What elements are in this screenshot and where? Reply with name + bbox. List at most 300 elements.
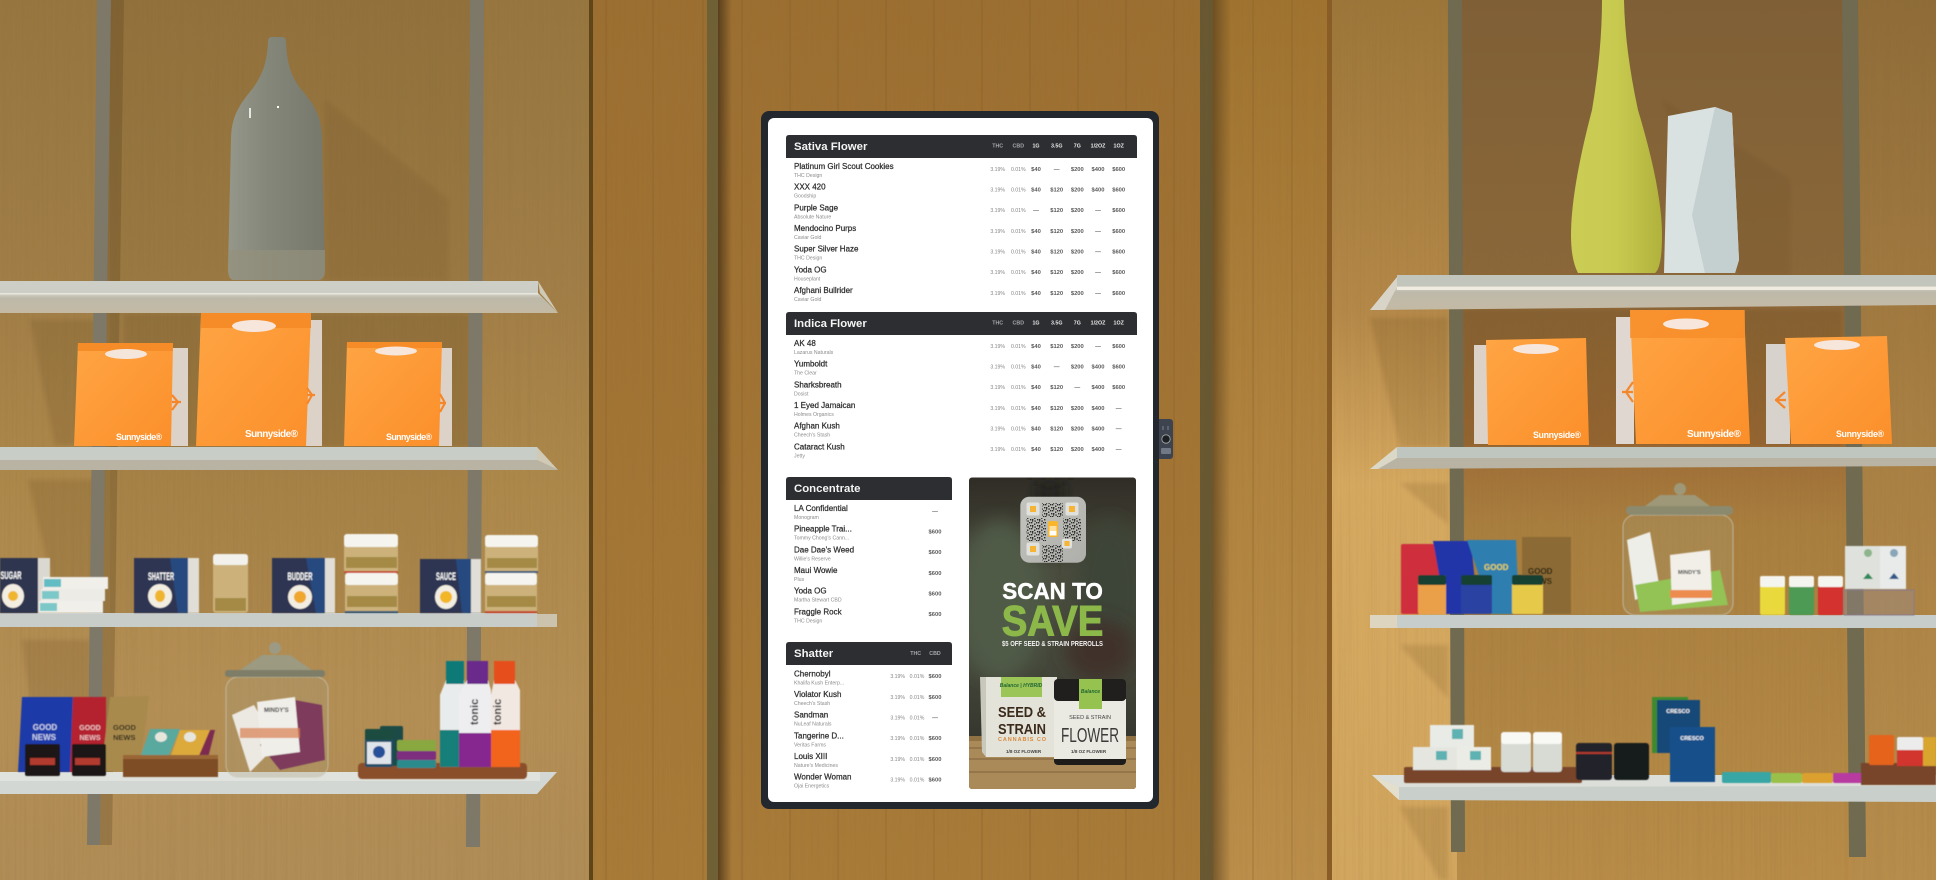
row: Mendocino Purps: 3.19% (990, 229, 1005, 235)
bag 2: Sunnyside® (245, 429, 299, 440)
boxes on wood tray (1404, 725, 1582, 783)
sativa header: 1OZ (1114, 144, 1125, 150)
row: Sharksbreath (794, 380, 1125, 397)
good news bags: NEWS (113, 733, 136, 742)
product box: seed and strain: 1/8 OZ FLOWER (1006, 749, 1042, 754)
shelf: right top (1370, 275, 1936, 310)
row: Yoda OG: Yoda OG (794, 587, 827, 596)
row: Platinum Girl Scout Cookies: 3.19% (990, 167, 1005, 173)
bag C (1766, 336, 1892, 444)
shatter header: CBD (929, 651, 941, 657)
row: Yumboldt: $400 (1092, 364, 1104, 370)
row: Violator Kush: 0.01% (910, 695, 925, 701)
panel: concentrate menu (786, 477, 952, 624)
row: Chernobyl: 3.19% (890, 674, 905, 680)
row: Afghani Bullrider: $120 (1050, 291, 1063, 297)
pill bottles (1760, 576, 1843, 615)
row: Tangerine D...: Veritas Farms (794, 742, 826, 748)
row: Super Silver Haze (794, 245, 1125, 262)
row: XXX 420: Goodship (794, 194, 816, 200)
row: Sharksbreath: $400 (1092, 385, 1104, 391)
bag 1: Sunnyside® (116, 432, 163, 442)
row: AK 48: $600 (1112, 344, 1125, 350)
row: Fraggle Rock: $600 (929, 612, 941, 618)
row: 1 Eyed Jamaican: $400 (1092, 406, 1104, 412)
bag B: Sunnyside® (1687, 429, 1742, 440)
glass jar (1623, 483, 1733, 615)
row: Cataract Kush: Cataract Kush (794, 442, 845, 451)
box: budder: BUDDER (288, 571, 313, 583)
row: Chernobyl: Chernobyl (794, 669, 831, 678)
row: Yumboldt (794, 360, 1125, 377)
product box: seed and strain: STRAIN (998, 721, 1046, 738)
row: Sandman (794, 711, 938, 728)
row: Violator Kush: 3.19% (890, 695, 905, 701)
row: Chernobyl: $600 (929, 674, 941, 680)
row: Sharksbreath: $120 (1050, 385, 1063, 391)
row: Yumboldt: 0.01% (1011, 364, 1026, 370)
row: Maui Wowie: Plus (794, 577, 804, 583)
row: Purple Sage: $600 (1112, 208, 1125, 214)
row: Louis XIII: 0.01% (910, 757, 925, 763)
product jar: flower (1054, 679, 1126, 765)
row: Platinum Girl Scout Cookies: Platinum Girl Scout Cookies (794, 162, 894, 171)
dark jars (25, 744, 106, 776)
row: Tangerine D...: $600 (929, 736, 941, 742)
row: 1 Eyed Jamaican: $200 (1071, 406, 1084, 412)
row: Yoda OG: $600 (1112, 270, 1125, 276)
row: Mendocino Purps: $40 (1031, 229, 1041, 235)
cresco boxes: CRESCO (1680, 736, 1704, 742)
indica header: 1G (1032, 320, 1040, 326)
row: Sandman: Sandman (794, 711, 828, 720)
row: AK 48: $120 (1050, 344, 1063, 350)
row: 1 Eyed Jamaican: Holmes Organics (794, 412, 834, 418)
wooden box with cards (123, 729, 218, 777)
row: Afghani Bullrider: Afghani Bullrider (794, 286, 853, 295)
tins and tonic bottles (365, 661, 520, 768)
row: Chernobyl: Khalifa Kush Enterp... (794, 680, 844, 686)
row: Afghani Bullrider: $200 (1071, 291, 1084, 297)
row: AK 48: — (1095, 344, 1101, 350)
row: Cataract Kush: Jetty (794, 453, 805, 459)
row: Platinum Girl Scout Cookies (794, 162, 1125, 179)
products: right fourth shelf (1404, 697, 1936, 785)
shelf: left fourth (0, 772, 557, 794)
shelf: left top (0, 281, 558, 313)
row: Yumboldt: $200 (1071, 364, 1084, 370)
row: Sharksbreath: 0.01% (1011, 385, 1026, 391)
row: Super Silver Haze: $200 (1071, 249, 1084, 255)
row: Sandman: NuLeaf Naturals (794, 722, 832, 728)
good news bags: GOOD (1484, 563, 1509, 572)
vase: grey ceramic (228, 37, 325, 280)
row: Afghani Bullrider (794, 286, 1125, 303)
offer line: $5 OFF SEED & STRAIN PREROLLS (1002, 639, 1103, 648)
row: Cataract Kush: $400 (1092, 447, 1104, 453)
row: XXX 420: $600 (1112, 187, 1125, 193)
row: LA Confidential: LA Confidential (794, 504, 848, 513)
row: Mendocino Purps: $120 (1050, 229, 1063, 235)
sativa header: 7G (1074, 144, 1081, 150)
row: Dae Dae's Weed (794, 545, 941, 562)
row: 1 Eyed Jamaican: — (1116, 406, 1122, 412)
row: Dae Dae's Weed: Dae Dae's Weed (794, 545, 854, 554)
row: Platinum Girl Scout Cookies: $600 (1112, 167, 1125, 173)
row: Sharksbreath: $600 (1112, 385, 1125, 391)
row: AK 48: 3.19% (990, 344, 1005, 350)
box: sauce (420, 559, 481, 613)
row: Purple Sage: $200 (1071, 208, 1084, 214)
row: Fraggle Rock (794, 607, 941, 624)
row: Tangerine D...: Tangerine D... (794, 731, 844, 740)
row: Platinum Girl Scout Cookies: THC Design (794, 173, 822, 179)
vase: white angular (1664, 107, 1739, 273)
row: Afghan Kush: 3.19% (990, 426, 1005, 432)
indica header (786, 312, 1137, 335)
box: budder (272, 558, 335, 613)
row: Purple Sage: 0.01% (1011, 208, 1026, 214)
shatter header (786, 642, 952, 665)
row: Pineapple Trai...: Tommy Chong's Cann... (794, 536, 849, 542)
row: LA Confidential (794, 504, 938, 521)
row: Super Silver Haze: $600 (1112, 249, 1125, 255)
row: Platinum Girl Scout Cookies: $400 (1092, 167, 1104, 173)
good news bags: GOOD (1528, 567, 1553, 576)
row: Platinum Girl Scout Cookies: $40 (1031, 167, 1041, 173)
row: 1 Eyed Jamaican: $40 (1031, 406, 1041, 412)
display stand and boxes (1844, 546, 1914, 615)
jar stack one (344, 534, 398, 613)
row: Afghani Bullrider: — (1095, 291, 1101, 297)
glass jar: MINDY'S (1678, 570, 1701, 576)
shelf: right second (1370, 447, 1936, 469)
row: XXX 420: XXX 420 (794, 183, 826, 192)
row: Tangerine D...: 0.01% (910, 736, 925, 742)
good news bags: GOOD (79, 725, 101, 732)
cresco boxes: CRESCO (1666, 709, 1690, 715)
sativa header: THC (992, 144, 1003, 150)
product box: seed and strain: CANNABIS CO (998, 737, 1047, 743)
row: Violator Kush: Cheech's Stash (794, 701, 830, 707)
row: Wonder Woman: 0.01% (910, 777, 925, 783)
row: 1 Eyed Jamaican: $120 (1050, 406, 1063, 412)
sativa header: Sativa Flower (794, 141, 868, 153)
row: 1 Eyed Jamaican: 0.01% (1011, 406, 1026, 412)
bag A (1474, 338, 1589, 445)
good news bags: NEWS (1528, 577, 1553, 586)
row: Sandman: — (932, 715, 938, 721)
row: Yumboldt: Yumboldt (794, 360, 828, 369)
row: Super Silver Haze: $40 (1031, 249, 1041, 255)
row: Louis XIII: Nature's Medicines (794, 763, 838, 769)
box: sauce: SAUCE (436, 571, 456, 583)
row: AK 48 (794, 339, 1125, 356)
row: Afghan Kush (794, 422, 1122, 439)
row: Purple Sage: 3.19% (990, 208, 1005, 214)
sativa header: CBD (1013, 144, 1024, 150)
indica header: CBD (1013, 320, 1024, 326)
row: Cataract Kush: 0.01% (1011, 447, 1026, 453)
black jars (1576, 743, 1649, 780)
tins and tonic bottles: tonic (492, 699, 504, 725)
row: Yoda OG: $600 (929, 591, 941, 597)
row: 1 Eyed Jamaican: 3.19% (990, 406, 1005, 412)
concentrate header (786, 477, 952, 500)
row: LA Confidential: Monogram (794, 515, 819, 521)
indica header: THC (992, 320, 1003, 326)
row: Violator Kush (794, 690, 941, 707)
row: AK 48: AK 48 (794, 339, 816, 348)
row: Mendocino Purps: $200 (1071, 229, 1084, 235)
row: Pineapple Trai... (794, 525, 941, 542)
good news bags: GOOD (33, 723, 57, 732)
row: Pineapple Trai...: Pineapple Trai... (794, 525, 852, 534)
row: Louis XIII (794, 752, 941, 769)
row: Violator Kush: $600 (929, 695, 941, 701)
wood tray (358, 763, 527, 779)
row: AK 48: $40 (1031, 344, 1041, 350)
right wood tray and jars (1861, 735, 1936, 785)
shelf: right fourth (1372, 775, 1936, 802)
row: 1 Eyed Jamaican: 1 Eyed Jamaican (794, 401, 855, 410)
row: Maui Wowie (794, 566, 941, 583)
panel: scan to save ad (969, 478, 1136, 789)
tins and tonic bottles: tonic (469, 699, 481, 725)
row: Yoda OG: $200 (1071, 270, 1084, 276)
row: Tangerine D...: 3.19% (890, 736, 905, 742)
product jar: flower: 1/8 OZ FLOWER (1071, 749, 1107, 754)
good news bags (1401, 537, 1571, 614)
bag C: Sunnyside® (1836, 429, 1885, 439)
row: Afghani Bullrider: 0.01% (1011, 291, 1026, 297)
shelf: left third (0, 613, 557, 627)
side camera device (1155, 419, 1173, 459)
row: Purple Sage: Purple Sage (794, 203, 839, 212)
row: Yumboldt: $40 (1031, 364, 1041, 370)
display bezel (761, 111, 1159, 809)
row: Tangerine D... (794, 731, 941, 748)
orange bags: right (1474, 310, 1892, 445)
row: Yumboldt: The Clear (794, 371, 817, 377)
row: Louis XIII: 3.19% (890, 757, 905, 763)
box: sugar (0, 558, 50, 613)
panel: sativa flower menu (786, 135, 1137, 303)
bag 1 (74, 343, 188, 446)
row: Afghani Bullrider: $600 (1112, 291, 1125, 297)
row: Afghan Kush: $400 (1092, 426, 1104, 432)
row: Yoda OG: Yoda OG (794, 265, 827, 274)
indica header: 3.5G (1051, 320, 1062, 326)
row: Yumboldt: $600 (1112, 364, 1125, 370)
row: Dae Dae's Weed: Willie's Reserve (794, 556, 831, 562)
row: Purple Sage: — (1095, 208, 1101, 214)
vase: yellow green (1571, 0, 1662, 273)
row: Yoda OG: 3.19% (990, 270, 1005, 276)
row: Sandman: 3.19% (890, 715, 905, 721)
bag 3 (344, 342, 452, 446)
box: shatter (134, 558, 199, 613)
row: Sharksbreath: 3.19% (990, 385, 1005, 391)
panel: shatter menu (786, 642, 952, 790)
row: Super Silver Haze: Super Silver Haze (794, 245, 859, 254)
sativa header: 1G (1032, 144, 1040, 150)
row: Yoda OG (794, 265, 1125, 282)
row: XXX 420: $200 (1071, 187, 1084, 193)
bag 3: Sunnyside® (386, 432, 433, 442)
row: Fraggle Rock: Fraggle Rock (794, 607, 843, 616)
save heading: SAVE (1002, 598, 1103, 646)
row: Yoda OG: $120 (1050, 270, 1063, 276)
row: Yoda OG: Houseplant (794, 276, 821, 282)
sativa header (786, 135, 1137, 158)
indica header: 7G (1074, 320, 1081, 326)
row: Platinum Girl Scout Cookies: 0.01% (1011, 167, 1026, 173)
row: Chernobyl: 0.01% (910, 674, 925, 680)
stacked white boxes (39, 577, 108, 613)
good news bags: NEWS (80, 735, 101, 742)
product box: seed and strain (980, 677, 1057, 757)
sativa header: 3.5G (1051, 144, 1062, 150)
shelf: left second (0, 447, 558, 470)
row: Yoda OG (794, 587, 941, 604)
concentrate boxes and jars: left third shelf (0, 534, 538, 613)
row: Afghani Bullrider: $40 (1031, 291, 1041, 297)
row: Yoda OG: 0.01% (1011, 270, 1026, 276)
panel: indica flower menu (786, 312, 1137, 459)
row: Super Silver Haze: — (1095, 249, 1101, 255)
orange bags: left (74, 313, 452, 446)
row: LA Confidential: — (932, 509, 938, 515)
indica header: 1/2OZ (1091, 320, 1106, 326)
good news bags (18, 696, 149, 772)
indica header: 1OZ (1114, 320, 1125, 326)
row: Maui Wowie: Maui Wowie (794, 566, 838, 575)
edibles and tonics: left fourth shelf (18, 642, 527, 779)
row: Fraggle Rock: THC Design (794, 618, 822, 624)
products: right third shelf (1401, 483, 1914, 615)
indica header: Indica Flower (794, 318, 867, 330)
row: Sandman: 0.01% (910, 715, 925, 721)
row: Louis XIII: $600 (929, 757, 941, 763)
shatter header: THC (910, 651, 921, 657)
row: Chernobyl (794, 669, 941, 686)
row: AK 48: 0.01% (1011, 344, 1026, 350)
row: Wonder Woman: Wonder Woman (794, 773, 852, 782)
row: Afghan Kush: $40 (1031, 426, 1041, 432)
row: Yumboldt: — (1054, 364, 1060, 370)
box: shatter: SHATTER (148, 571, 174, 583)
row: Afghan Kush: $120 (1050, 426, 1063, 432)
row: Yoda OG: — (1095, 270, 1101, 276)
row: Yoda OG: Martha Stewart CBD (794, 598, 842, 604)
row: XXX 420: 0.01% (1011, 187, 1026, 193)
row: Wonder Woman: $600 (929, 777, 941, 783)
row: Yumboldt: 3.19% (990, 364, 1005, 370)
good news bags: GOOD (113, 723, 137, 732)
row: Super Silver Haze: THC Design (794, 256, 822, 262)
row: Pineapple Trai...: $600 (929, 529, 941, 535)
row: Super Silver Haze: $120 (1050, 249, 1063, 255)
scan to heading: SCAN TO (1002, 578, 1103, 604)
row: Mendocino Purps: Caviar Gold (794, 235, 822, 241)
row: 1 Eyed Jamaican (794, 401, 1122, 418)
row: Platinum Girl Scout Cookies: — (1054, 167, 1060, 173)
row: Sharksbreath: $40 (1031, 385, 1041, 391)
row: Dae Dae's Weed: $600 (929, 550, 941, 556)
ad blurred photo background (969, 478, 1136, 789)
row: XXX 420: $120 (1050, 187, 1063, 193)
sativa header: 1/2OZ (1091, 144, 1106, 150)
row: Mendocino Purps (794, 224, 1125, 241)
row: Super Silver Haze: 3.19% (990, 249, 1005, 255)
qr code (1020, 497, 1086, 563)
row: Mendocino Purps: — (1095, 229, 1101, 235)
row: Afghani Bullrider: Caviar Gold (794, 297, 822, 303)
jar: high supply (213, 554, 248, 613)
row: AK 48: Lazarus Naturals (794, 350, 834, 356)
row: Purple Sage: Absolute Nature (794, 214, 831, 220)
row: Yoda OG: $40 (1031, 270, 1041, 276)
wooden table (969, 736, 1136, 789)
row: Cataract Kush: 3.19% (990, 447, 1005, 453)
row: Sharksbreath: Dosist (794, 391, 809, 397)
bag B (1616, 310, 1750, 444)
jar stack two (485, 535, 538, 613)
row: XXX 420: $400 (1092, 187, 1104, 193)
row: Sharksbreath: — (1074, 385, 1080, 391)
cresco boxes (1652, 697, 1715, 782)
row: Mendocino Purps: $600 (1112, 229, 1125, 235)
small jars with green caps (1418, 575, 1543, 614)
row: Afghan Kush: $200 (1071, 426, 1084, 432)
row: Cataract Kush (794, 442, 1122, 459)
row: Afghan Kush: — (1116, 426, 1122, 432)
row: Violator Kush: Violator Kush (794, 690, 841, 699)
product jar: flower: Balance (1081, 689, 1100, 695)
row: AK 48: $200 (1071, 344, 1084, 350)
product box: seed and strain: Balance | HYBRID (1000, 683, 1043, 689)
concentrate header: Concentrate (794, 483, 860, 495)
row: Purple Sage: — (1033, 208, 1039, 214)
row: Sharksbreath: Sharksbreath (794, 380, 842, 389)
row: Louis XIII: Louis XIII (794, 752, 827, 761)
shelf: right third (1370, 615, 1936, 628)
row: Purple Sage (794, 203, 1125, 220)
row: Platinum Girl Scout Cookies: $200 (1071, 167, 1084, 173)
row: Afghan Kush: 0.01% (1011, 426, 1026, 432)
row: Wonder Woman (794, 773, 941, 790)
coloured tins (1722, 772, 1864, 783)
row: Cataract Kush: $200 (1071, 447, 1084, 453)
product jar: flower: FLOWER (1061, 725, 1119, 747)
row: Cataract Kush: $40 (1031, 447, 1041, 453)
good news bags: NEWS (32, 733, 57, 742)
glass jar: MINDY'S (264, 708, 289, 714)
bag 2 (196, 313, 322, 446)
row: XXX 420: 3.19% (990, 187, 1005, 193)
shatter header: Shatter (794, 648, 834, 660)
row: XXX 420 (794, 183, 1125, 200)
row: Afghan Kush: Afghan Kush (794, 422, 840, 431)
row: Cataract Kush: $120 (1050, 447, 1063, 453)
glass jar (225, 642, 328, 777)
row: Super Silver Haze: 0.01% (1011, 249, 1026, 255)
row: Mendocino Purps: 0.01% (1011, 229, 1026, 235)
row: Maui Wowie: $600 (929, 571, 941, 577)
box: sugar: SUGAR (0, 570, 22, 582)
product box: seed and strain: SEED & (998, 704, 1046, 721)
